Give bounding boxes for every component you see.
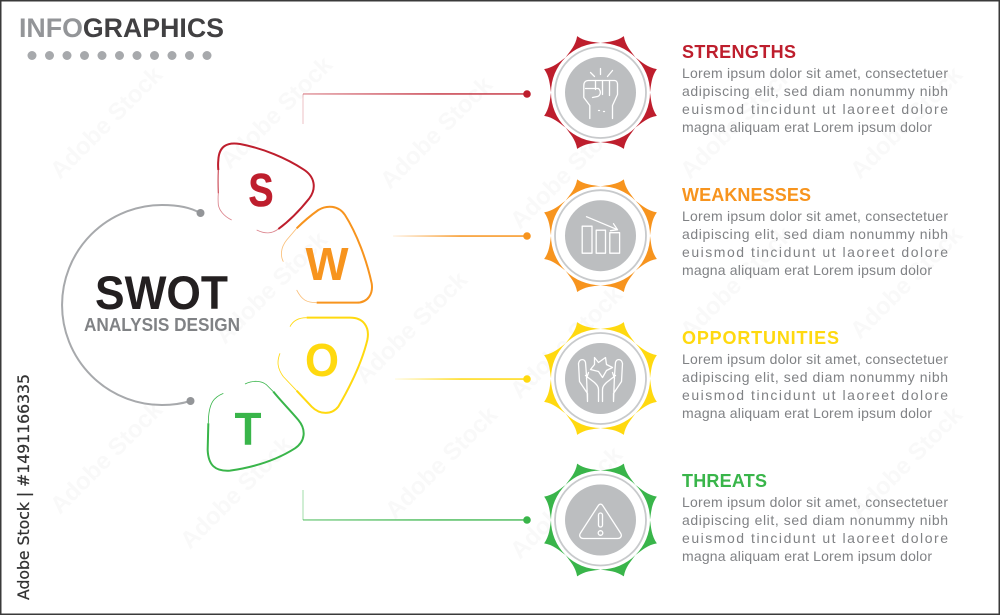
heading: opportunities: OPPORTUNITIES — [682, 328, 839, 348]
badge: strengths — [537, 29, 664, 156]
central arc with end dots — [62, 205, 204, 405]
watermark pattern: Adobe Stock — [505, 281, 628, 404]
body: threats: euismod tincidunt ut laoreet dolore — [682, 530, 948, 546]
text block: strengths — [682, 42, 948, 135]
central heading: SWOT: SWOT — [95, 266, 228, 319]
text block: weaknesses — [682, 185, 948, 278]
watermark pattern: Adobe Stock — [845, 221, 968, 344]
heading: threats: THREATS — [682, 471, 767, 491]
watermark pattern: Adobe Stock — [45, 396, 168, 519]
pick shape: W: W — [306, 238, 349, 290]
body: strengths: magna aliquam erat Lorem ipsum dolor — [682, 119, 932, 135]
body: weaknesses: euismod tincidunt ut laoreet dolore — [682, 244, 948, 260]
pick shape: W — [281, 207, 372, 303]
body: threats: Lorem ipsum dolor sit amet, consectetuer — [682, 494, 948, 510]
heading: strengths: STRENGTHS — [682, 42, 796, 62]
title dots — [28, 51, 212, 60]
connector: weaknesses — [393, 232, 531, 240]
body: weaknesses: magna aliquam erat Lorem ipsum dolor — [682, 262, 932, 278]
body: opportunities: magna aliquam erat Lorem ipsum dolor — [682, 405, 932, 421]
connector: threats — [303, 490, 531, 524]
body: opportunities: Lorem ipsum dolor sit amet, consectetuer — [682, 351, 948, 367]
pick shape: T — [208, 381, 304, 471]
pick shape: O — [278, 318, 368, 413]
watermark pattern: Adobe Stock — [505, 111, 628, 234]
body: opportunities — [682, 351, 948, 421]
body: opportunities: euismod tincidunt ut laoreet dolore — [682, 387, 948, 403]
connector: opportunities — [395, 375, 531, 383]
icon: hands holding star — [578, 358, 622, 402]
body: opportunities: adipiscing elit, sed diam nonummy nibh — [682, 369, 948, 385]
body: strengths: adipiscing elit, sed diam nonummy nibh — [682, 83, 948, 99]
stock id label: Adobe Stock | #1491166335 — [14, 374, 33, 600]
body: threats: magna aliquam erat Lorem ipsum dolor — [682, 548, 932, 564]
watermark pattern: Adobe Stock — [215, 51, 338, 174]
pick shape: O: O — [305, 334, 339, 386]
text block: threats — [682, 471, 948, 564]
title: infographics — [19, 13, 224, 60]
watermark pattern: Adobe Stock — [210, 226, 333, 349]
icon: warning triangle — [580, 504, 621, 538]
heading: weaknesses: WEAKNESSES — [682, 185, 811, 205]
body: threats: adipiscing elit, sed diam nonummy nibh — [682, 512, 948, 528]
body: weaknesses: Lorem ipsum dolor sit amet, consectetuer — [682, 208, 948, 224]
pick shape: T: T — [234, 403, 262, 455]
watermark pattern: Adobe Stock — [845, 61, 968, 184]
watermark pattern: Adobe Stock — [505, 441, 628, 564]
badge: weaknesses — [537, 172, 664, 299]
pick shape: S — [218, 143, 314, 233]
watermark pattern: Adobe Stock — [175, 431, 298, 554]
pick shape: S: S — [248, 164, 274, 216]
body: strengths: Lorem ipsum dolor sit amet, consectetuer — [682, 65, 948, 81]
body: weaknesses: adipiscing elit, sed diam nonummy nibh — [682, 226, 948, 242]
badge: opportunities — [537, 315, 664, 442]
watermark pattern: Adobe Stock — [675, 221, 798, 344]
text block: opportunities — [682, 328, 948, 421]
watermark pattern — [45, 51, 968, 564]
body: threats — [682, 494, 948, 564]
icon: fist — [584, 68, 618, 118]
body: strengths: euismod tincidunt ut laoreet dolore — [682, 101, 948, 117]
watermark pattern: Adobe Stock — [380, 401, 503, 524]
watermark pattern: Adobe Stock — [375, 71, 498, 194]
watermark pattern: Adobe Stock — [350, 266, 473, 389]
watermark pattern: Adobe Stock — [675, 61, 798, 184]
badge: threats — [537, 456, 664, 584]
icon: declining bars — [582, 217, 620, 253]
body: strengths — [682, 65, 948, 135]
body: weaknesses — [682, 208, 948, 278]
connector: strengths — [303, 90, 531, 124]
watermark pattern: Adobe Stock — [845, 401, 968, 524]
title: infographics: INFOGRAPHICS — [19, 13, 224, 43]
central subheading: ANALYSIS DESIGN — [84, 315, 240, 335]
watermark pattern: Adobe Stock — [45, 61, 168, 184]
